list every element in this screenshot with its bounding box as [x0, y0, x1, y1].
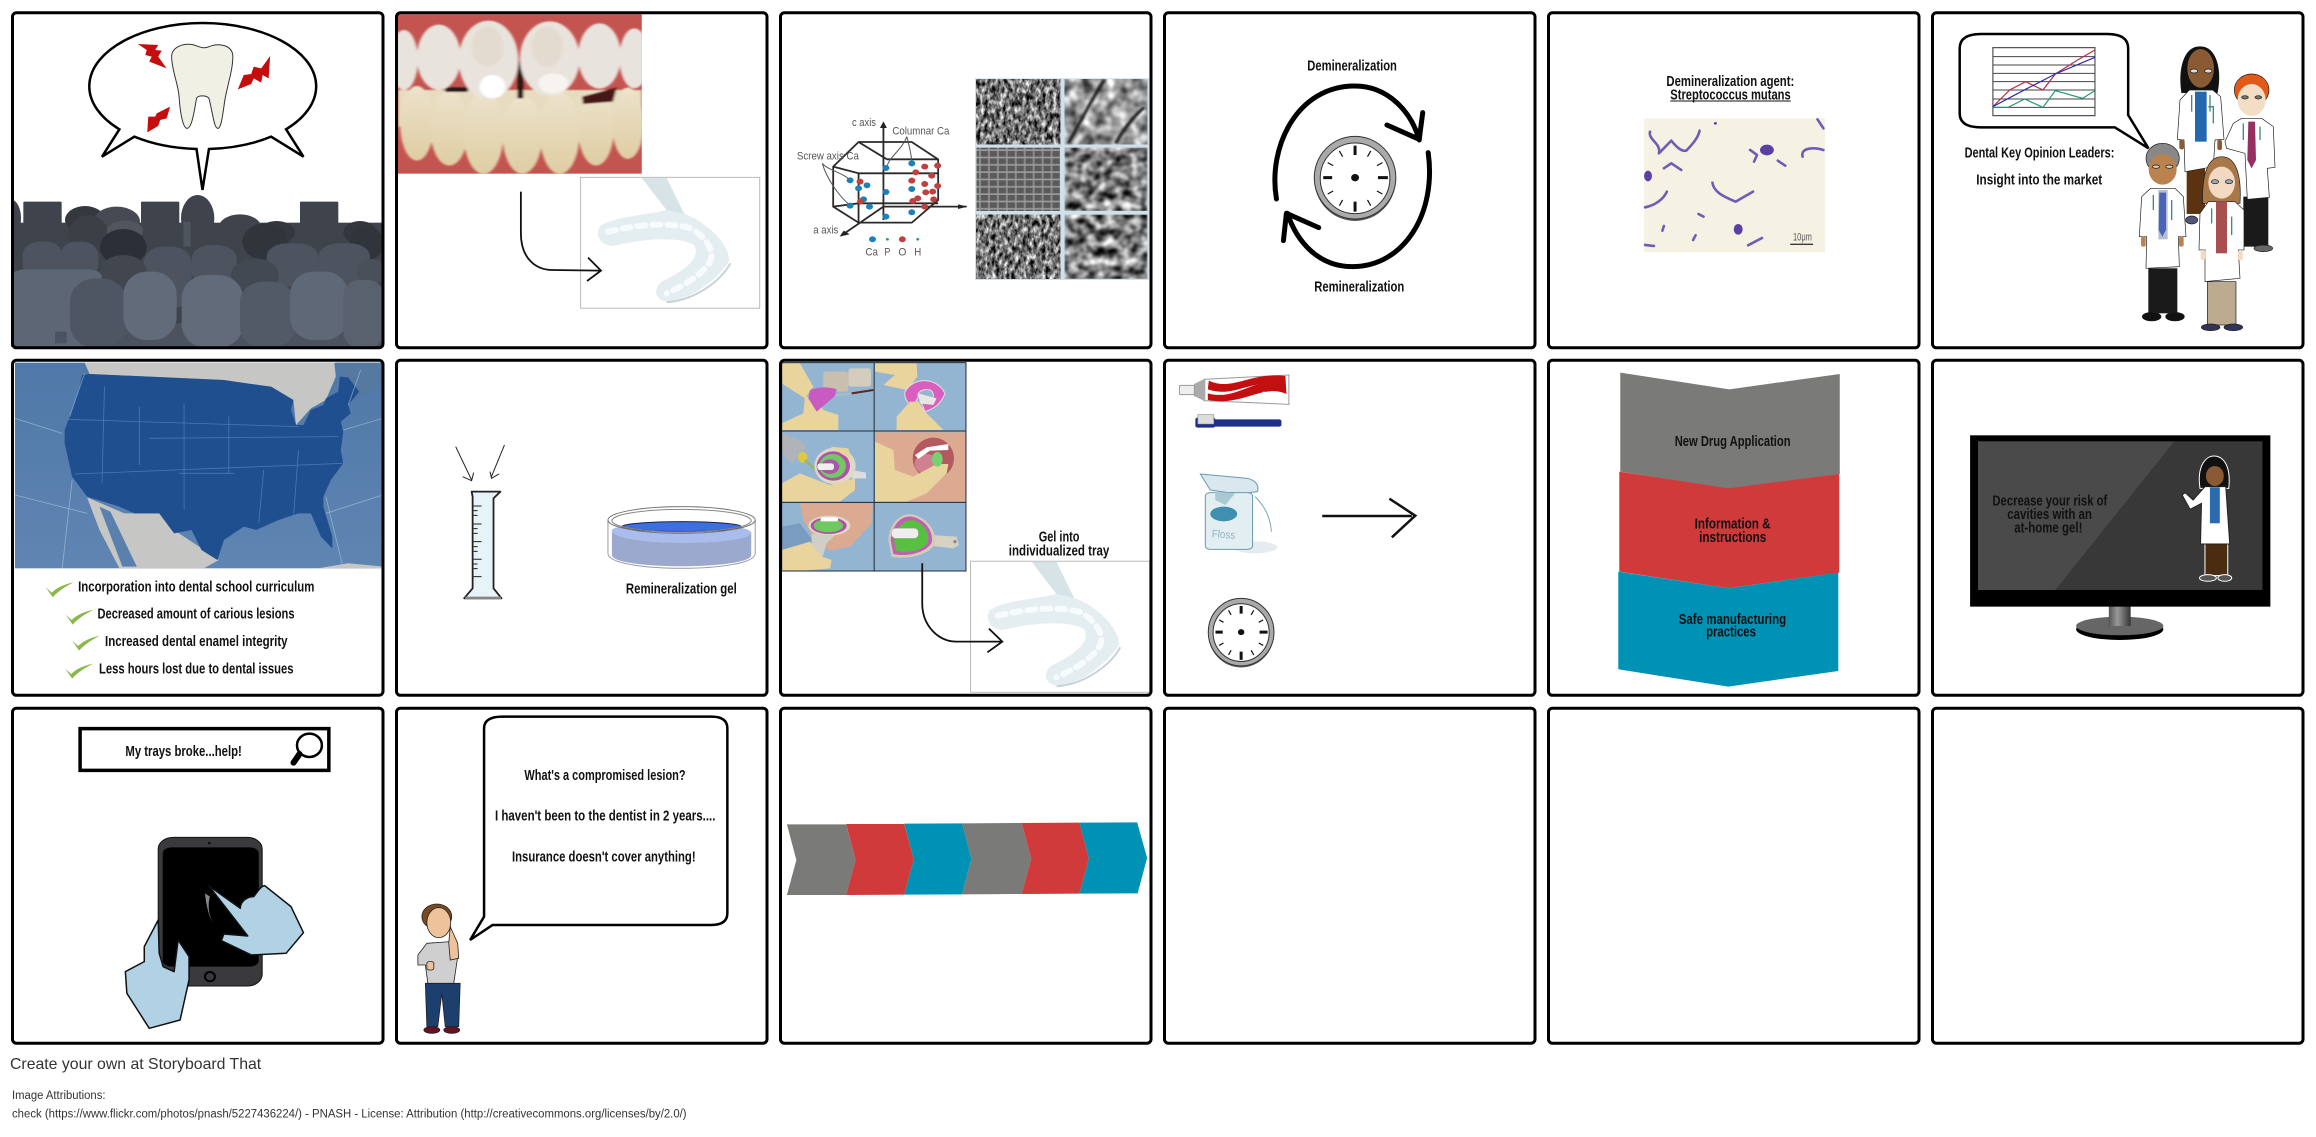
icon: clock	[1208, 598, 1274, 667]
footer: image attributions: Image Attributions:	[12, 1090, 106, 1102]
map: United States	[15, 363, 383, 568]
icon: tooth	[172, 44, 233, 128]
chevron: safe manufacturing practices: practices	[1706, 625, 1756, 641]
chevron: new drug application: New Drug Application	[1675, 434, 1791, 450]
label: floss: Floss	[1211, 528, 1236, 542]
arrow: right	[1322, 499, 1415, 537]
icon: pain lightning bolts	[138, 44, 270, 132]
checklist: benefits: Less hours lost due to dental issues	[99, 661, 294, 677]
panel 4: demineralization remineralization cycle	[1164, 13, 1535, 348]
diagram: hydroxyapatite crystal: O	[898, 246, 907, 258]
character: doctor on screen	[2182, 456, 2232, 581]
panel 14: patient questions	[396, 708, 767, 1043]
diagram: hydroxyapatite crystal: P	[884, 246, 890, 258]
diagram: hydroxyapatite crystal: c axis	[852, 117, 876, 129]
panel 17: empty	[1548, 708, 1919, 1043]
checklist: benefits: Incorporation into dental school curriculum	[78, 579, 314, 595]
step 1: mixing putty	[782, 363, 873, 430]
search bar	[80, 729, 329, 770]
group of doctors	[2139, 47, 2275, 331]
search bar: My trays broke...help!	[125, 744, 242, 760]
icon: monitor	[1970, 435, 2270, 640]
chevron: information and instructions: instructions	[1699, 530, 1766, 546]
panel 7: US map and benefits	[12, 360, 383, 695]
image grid: impression steps	[782, 363, 966, 571]
footer: image attributions	[12, 1090, 687, 1121]
on-screen message: at-home gel!	[2014, 521, 2082, 537]
character: confused patient	[418, 904, 460, 1033]
step 4: gel in mouth	[875, 432, 966, 502]
icon: hands on tablet	[125, 837, 303, 1028]
micrograph: bacteria chains	[1644, 118, 1825, 252]
chevron: new drug application	[1620, 373, 1840, 489]
caption: gel into individualized tray: individualized tray	[1009, 543, 1109, 559]
diagram: hydroxyapatite crystal: H	[914, 246, 921, 258]
step 3: syringing gel	[782, 433, 866, 502]
diagram: hydroxyapatite crystal: Ca	[866, 246, 879, 258]
character: woman doctor, back	[2177, 47, 2224, 224]
diagram: hydroxyapatite crystal: a axis	[813, 224, 839, 236]
footer: create your own: Create your own at Storyboard That	[10, 1056, 262, 1073]
panel 18: empty	[1932, 708, 2303, 1043]
caption: key opinion leaders: Dental Key Opinion Leaders:	[1965, 145, 2114, 161]
panel 11: regulatory chevron stack	[1548, 360, 1919, 695]
speech bubble: What's a compromised lesion?	[524, 768, 686, 784]
diagram: hydroxyapatite crystal: Columnar Ca	[892, 126, 950, 138]
step 5: tray in mouth	[782, 503, 873, 571]
checklist: benefits: Increased dental enamel integrity	[105, 634, 288, 650]
heading: demineralization agent	[1666, 74, 1794, 104]
footer: image attributions: check (https://www.flickr.com/photos/pnash/5227436224/) - PNASH - License: Attribution (http://creativecommons.org/licenses/by/2.0/)	[12, 1109, 687, 1121]
icon: petri dish with gel	[608, 507, 755, 568]
image: clear dental tray	[581, 177, 760, 308]
panel 15: horizontal chevrons	[780, 708, 1151, 1043]
character: red-haired doctor	[2225, 74, 2275, 252]
cycle arrows	[1275, 86, 1430, 267]
chevron: safe manufacturing practices	[1618, 572, 1838, 687]
panel 12: TV advertisement	[1932, 360, 2303, 695]
speech bubble	[89, 23, 316, 190]
image: clear dental tray	[970, 561, 1150, 692]
panel 2: teeth photo and tray	[390, 13, 767, 348]
caption: key opinion leaders: Insight into the market	[1976, 173, 2102, 189]
arrows into cylinder	[456, 445, 504, 481]
chevron: information and instructions	[1619, 472, 1839, 588]
character: gray-haired doctor	[2139, 143, 2186, 321]
panel 5: streptococcus mutans	[1548, 13, 1919, 348]
checklist: benefits: Decreased amount of carious lesions	[98, 607, 294, 623]
chevron: information and instructions: Information &	[1695, 516, 1771, 532]
step 2: loading tray	[875, 363, 945, 430]
label: demineralization: Demineralization	[1307, 58, 1397, 74]
arrow to tray	[922, 563, 1002, 652]
panel 9: impression steps and tray	[780, 360, 1151, 695]
heading: demineralization agent: Streptococcus mutans	[1670, 88, 1791, 104]
speech bubble: Insurance doesn't cover anything!	[512, 850, 696, 866]
speech bubble with chart	[1960, 34, 2148, 148]
panel 10: home care products	[1164, 360, 1535, 695]
checklist: benefits	[46, 579, 314, 679]
chevron: safe manufacturing practices: Safe manufacturing	[1679, 612, 1786, 628]
caption: gel into individualized tray	[1009, 530, 1109, 559]
on-screen message: cavities with an	[2007, 507, 2092, 523]
label: remineralization: Remineralization	[1314, 280, 1404, 296]
diagram: hydroxyapatite crystal: Screw axis Ca	[797, 150, 860, 162]
caption: gel into individualized tray: Gel into	[1039, 530, 1080, 546]
panel 8: graduated cylinder and gel dish	[396, 360, 767, 695]
panel 1: crowd thinking of tooth pain	[2, 13, 387, 348]
panel 3: enamel crystal structure and micrographs	[780, 13, 1151, 348]
panel 13: tablet search	[12, 708, 383, 1043]
speech bubble	[470, 717, 727, 940]
caption: key opinion leaders	[1965, 145, 2114, 189]
crowd silhouettes	[2, 195, 387, 348]
label: remineralization gel: Remineralization gel	[626, 581, 737, 597]
on-screen message	[1992, 493, 2107, 537]
speech bubble: I haven't been to the dentist in 2 years....	[495, 809, 715, 825]
character: brown-haired doctor, front	[2199, 157, 2244, 331]
diagram: hydroxyapatite crystal	[797, 117, 968, 258]
icon: floss	[1200, 474, 1277, 553]
arrow to tray	[521, 192, 601, 281]
icon: toothbrush	[1195, 415, 1281, 428]
panel 16: empty	[1164, 708, 1535, 1043]
chevron band	[787, 822, 1147, 895]
step 6: finished impression	[888, 514, 959, 558]
photo: teeth with white spots	[390, 14, 649, 174]
micrograph: bacteria chains: 10μm	[1793, 232, 1812, 244]
micrographs grid	[975, 78, 1149, 280]
icon: clock	[1314, 136, 1396, 221]
icon: toothpaste	[1179, 375, 1289, 404]
heading: demineralization agent: Demineralization agent:	[1666, 74, 1794, 90]
panel 6: dental key opinion leaders	[1932, 13, 2303, 348]
on-screen message: Decrease your risk of	[1992, 493, 2107, 509]
icon: graduated cylinder	[464, 492, 501, 599]
